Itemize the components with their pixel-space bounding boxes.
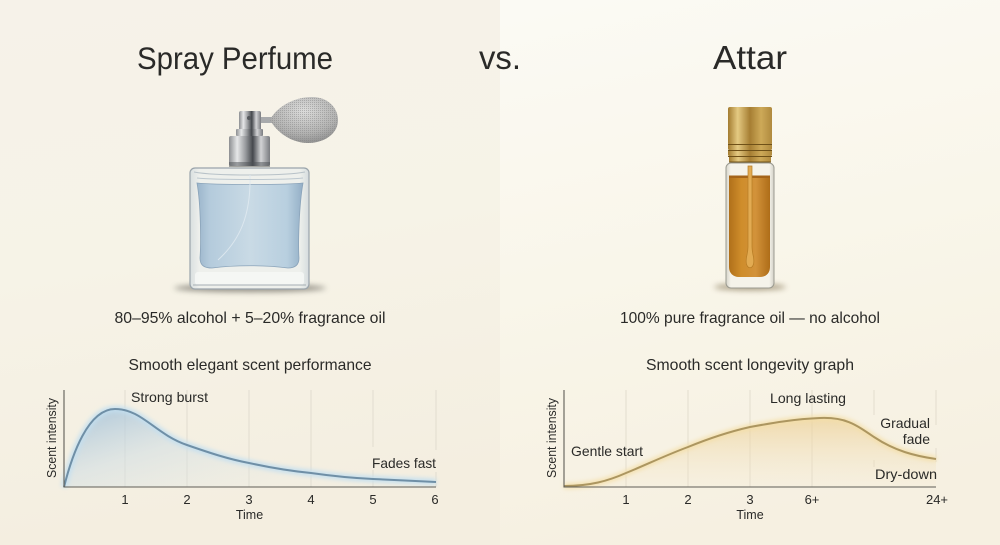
x axis label: Time [236, 508, 263, 522]
annotation: strong burst: Strong burst [131, 389, 208, 405]
icon: attar bottle [714, 107, 786, 290]
chart: attar scent longevity [545, 390, 948, 522]
x axis label: Time [736, 508, 764, 522]
x axis ticks: 2 [183, 492, 191, 507]
glass vial [726, 163, 774, 288]
chart: spray perfume scent intensity [45, 389, 439, 522]
x axis ticks: 3 [746, 492, 754, 507]
heading: attar chart: Smooth scent longevity graph [646, 357, 854, 374]
y axis label: Scent intensity [545, 397, 559, 478]
curve fill [564, 418, 936, 487]
annotation: fades fast: Fades fast [372, 455, 436, 471]
annotation: gradual fade: fade [903, 431, 930, 447]
annotation: long lasting: Long lasting [770, 390, 846, 406]
blue liquid [197, 183, 303, 268]
x axis ticks: 1 [121, 492, 129, 507]
curve fill [64, 409, 436, 487]
title: attar: Attar [713, 39, 787, 76]
x axis ticks: 24+ [926, 492, 948, 507]
y axis label: Scent intensity [45, 397, 59, 478]
annotation: dry-down: Dry-down [875, 466, 937, 482]
x axis ticks: 2 [684, 492, 692, 507]
nozzle and collar [229, 111, 270, 167]
axes [64, 390, 436, 487]
atomizer bulb [260, 97, 338, 143]
x axis ticks: 4 [307, 492, 315, 507]
annotation: gradual fade [880, 415, 930, 447]
text: spray composition: 80–95% alcohol + 5–20% fragrance oil [114, 310, 386, 327]
x axis ticks: 6+ [805, 492, 819, 507]
gold cap [728, 107, 772, 162]
title: spray perfume: Spray Perfume [137, 40, 333, 76]
x axis ticks [622, 492, 948, 507]
annotation: gradual fade: Gradual [880, 415, 930, 431]
annotation: gentle start: Gentle start [571, 443, 643, 459]
x axis ticks: 3 [245, 492, 253, 507]
panel: attar background [500, 0, 1000, 545]
curve line [564, 418, 936, 486]
curve line [64, 409, 436, 487]
text: attar composition: 100% pure fragrance oil — no alcohol [620, 310, 880, 327]
panel: spray perfume background [0, 0, 500, 545]
x axis ticks: 1 [622, 492, 630, 507]
amber oil [729, 177, 770, 277]
x axis ticks [121, 492, 439, 507]
icon: spray perfume bottle [174, 97, 338, 292]
applicator wand [746, 166, 754, 268]
title: vs.: vs. [479, 39, 521, 76]
x axis ticks: 6 [431, 492, 439, 507]
glass body [190, 168, 309, 289]
x axis ticks: 5 [369, 492, 377, 507]
heading: spray chart: Smooth elegant scent performance [128, 357, 372, 374]
axes [564, 390, 936, 487]
